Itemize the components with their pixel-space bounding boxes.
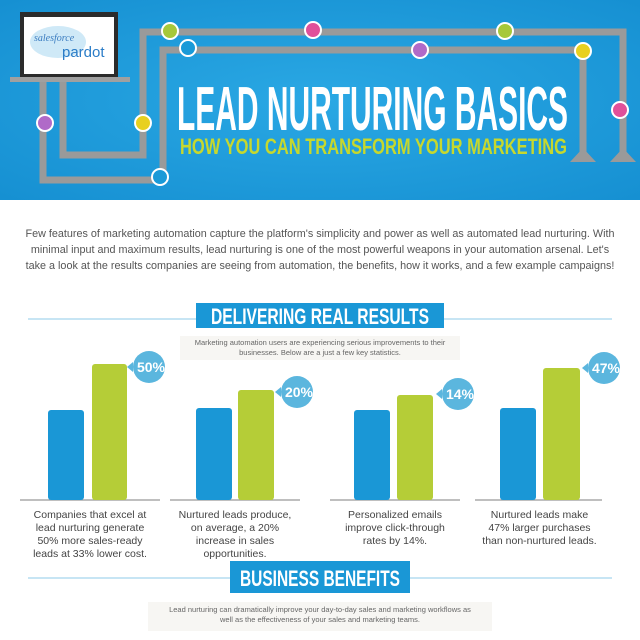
section heading: business benefits: BUSINESS BENEFITS [240, 566, 400, 591]
section heading: delivering real results [28, 303, 612, 329]
header banner [0, 0, 640, 200]
caption 1: Companies that excel at [34, 509, 146, 521]
caption 4: than non-nurtured leads. [482, 535, 597, 547]
intro paragraph [26, 228, 614, 272]
caption 1: lead nurturing generate [36, 522, 144, 534]
laptop with logo: pardot [62, 44, 105, 61]
caption 4: 47% larger purchases [488, 522, 591, 534]
caption 4 [482, 509, 597, 547]
results subtext: Marketing automation users are experiencing serious improvements to their [195, 338, 445, 347]
bar chart [20, 351, 621, 501]
results subtext [180, 336, 460, 360]
caption 3: rates by 14%. [363, 535, 427, 547]
caption 2 [179, 509, 291, 560]
caption 3: Personalized emails [348, 509, 442, 521]
intro paragraph: take a look at the results companies are seeing from automation, the benefits, how it works, and a few example campaigns! [26, 260, 614, 272]
caption 1: 50% more sales-ready [37, 535, 143, 547]
caption 2: on average, a 20% [191, 522, 279, 534]
laptop with logo [10, 12, 130, 82]
caption 2: increase in sales [196, 535, 274, 547]
pipes [43, 32, 623, 180]
results subtext: businesses. Below are a just a few key statistics. [239, 348, 401, 357]
bar chart: 20% [285, 384, 314, 400]
intro paragraph: minimal input and maximum results, lead nurturing is one of the most powerful weapons in your automation arsenal. Let's [31, 244, 609, 256]
icons on pipes [37, 22, 628, 185]
benefits subtext [148, 602, 492, 631]
caption 3 [345, 509, 445, 547]
caption 1: leads at 33% lower cost. [33, 548, 147, 560]
caption 4: Nurtured leads make [491, 509, 588, 521]
caption 2: opportunities. [203, 548, 267, 560]
bar chart: 14% [446, 386, 475, 402]
benefits subtext: Lead nurturing can dramatically improve your day-to-day sales and marketing workflows as [169, 605, 471, 614]
pipe stands [570, 148, 636, 162]
intro paragraph: Few features of marketing automation capture the platform's simplicity and power as well as automated lead nurturing. With [26, 228, 614, 240]
section heading: delivering real results: DELIVERING REAL RESULTS [211, 304, 429, 329]
section heading: business benefits [28, 561, 612, 593]
caption 1 [33, 509, 147, 560]
caption 2: Nurtured leads produce, [179, 509, 291, 521]
laptop with logo: salesforce [34, 33, 75, 44]
benefits subtext: well as the effectiveness of your sales and marketing teams. [220, 615, 420, 624]
caption 3: improve click-through [345, 522, 445, 534]
bar chart: 47% [592, 360, 621, 376]
bar chart: 50% [137, 359, 166, 375]
